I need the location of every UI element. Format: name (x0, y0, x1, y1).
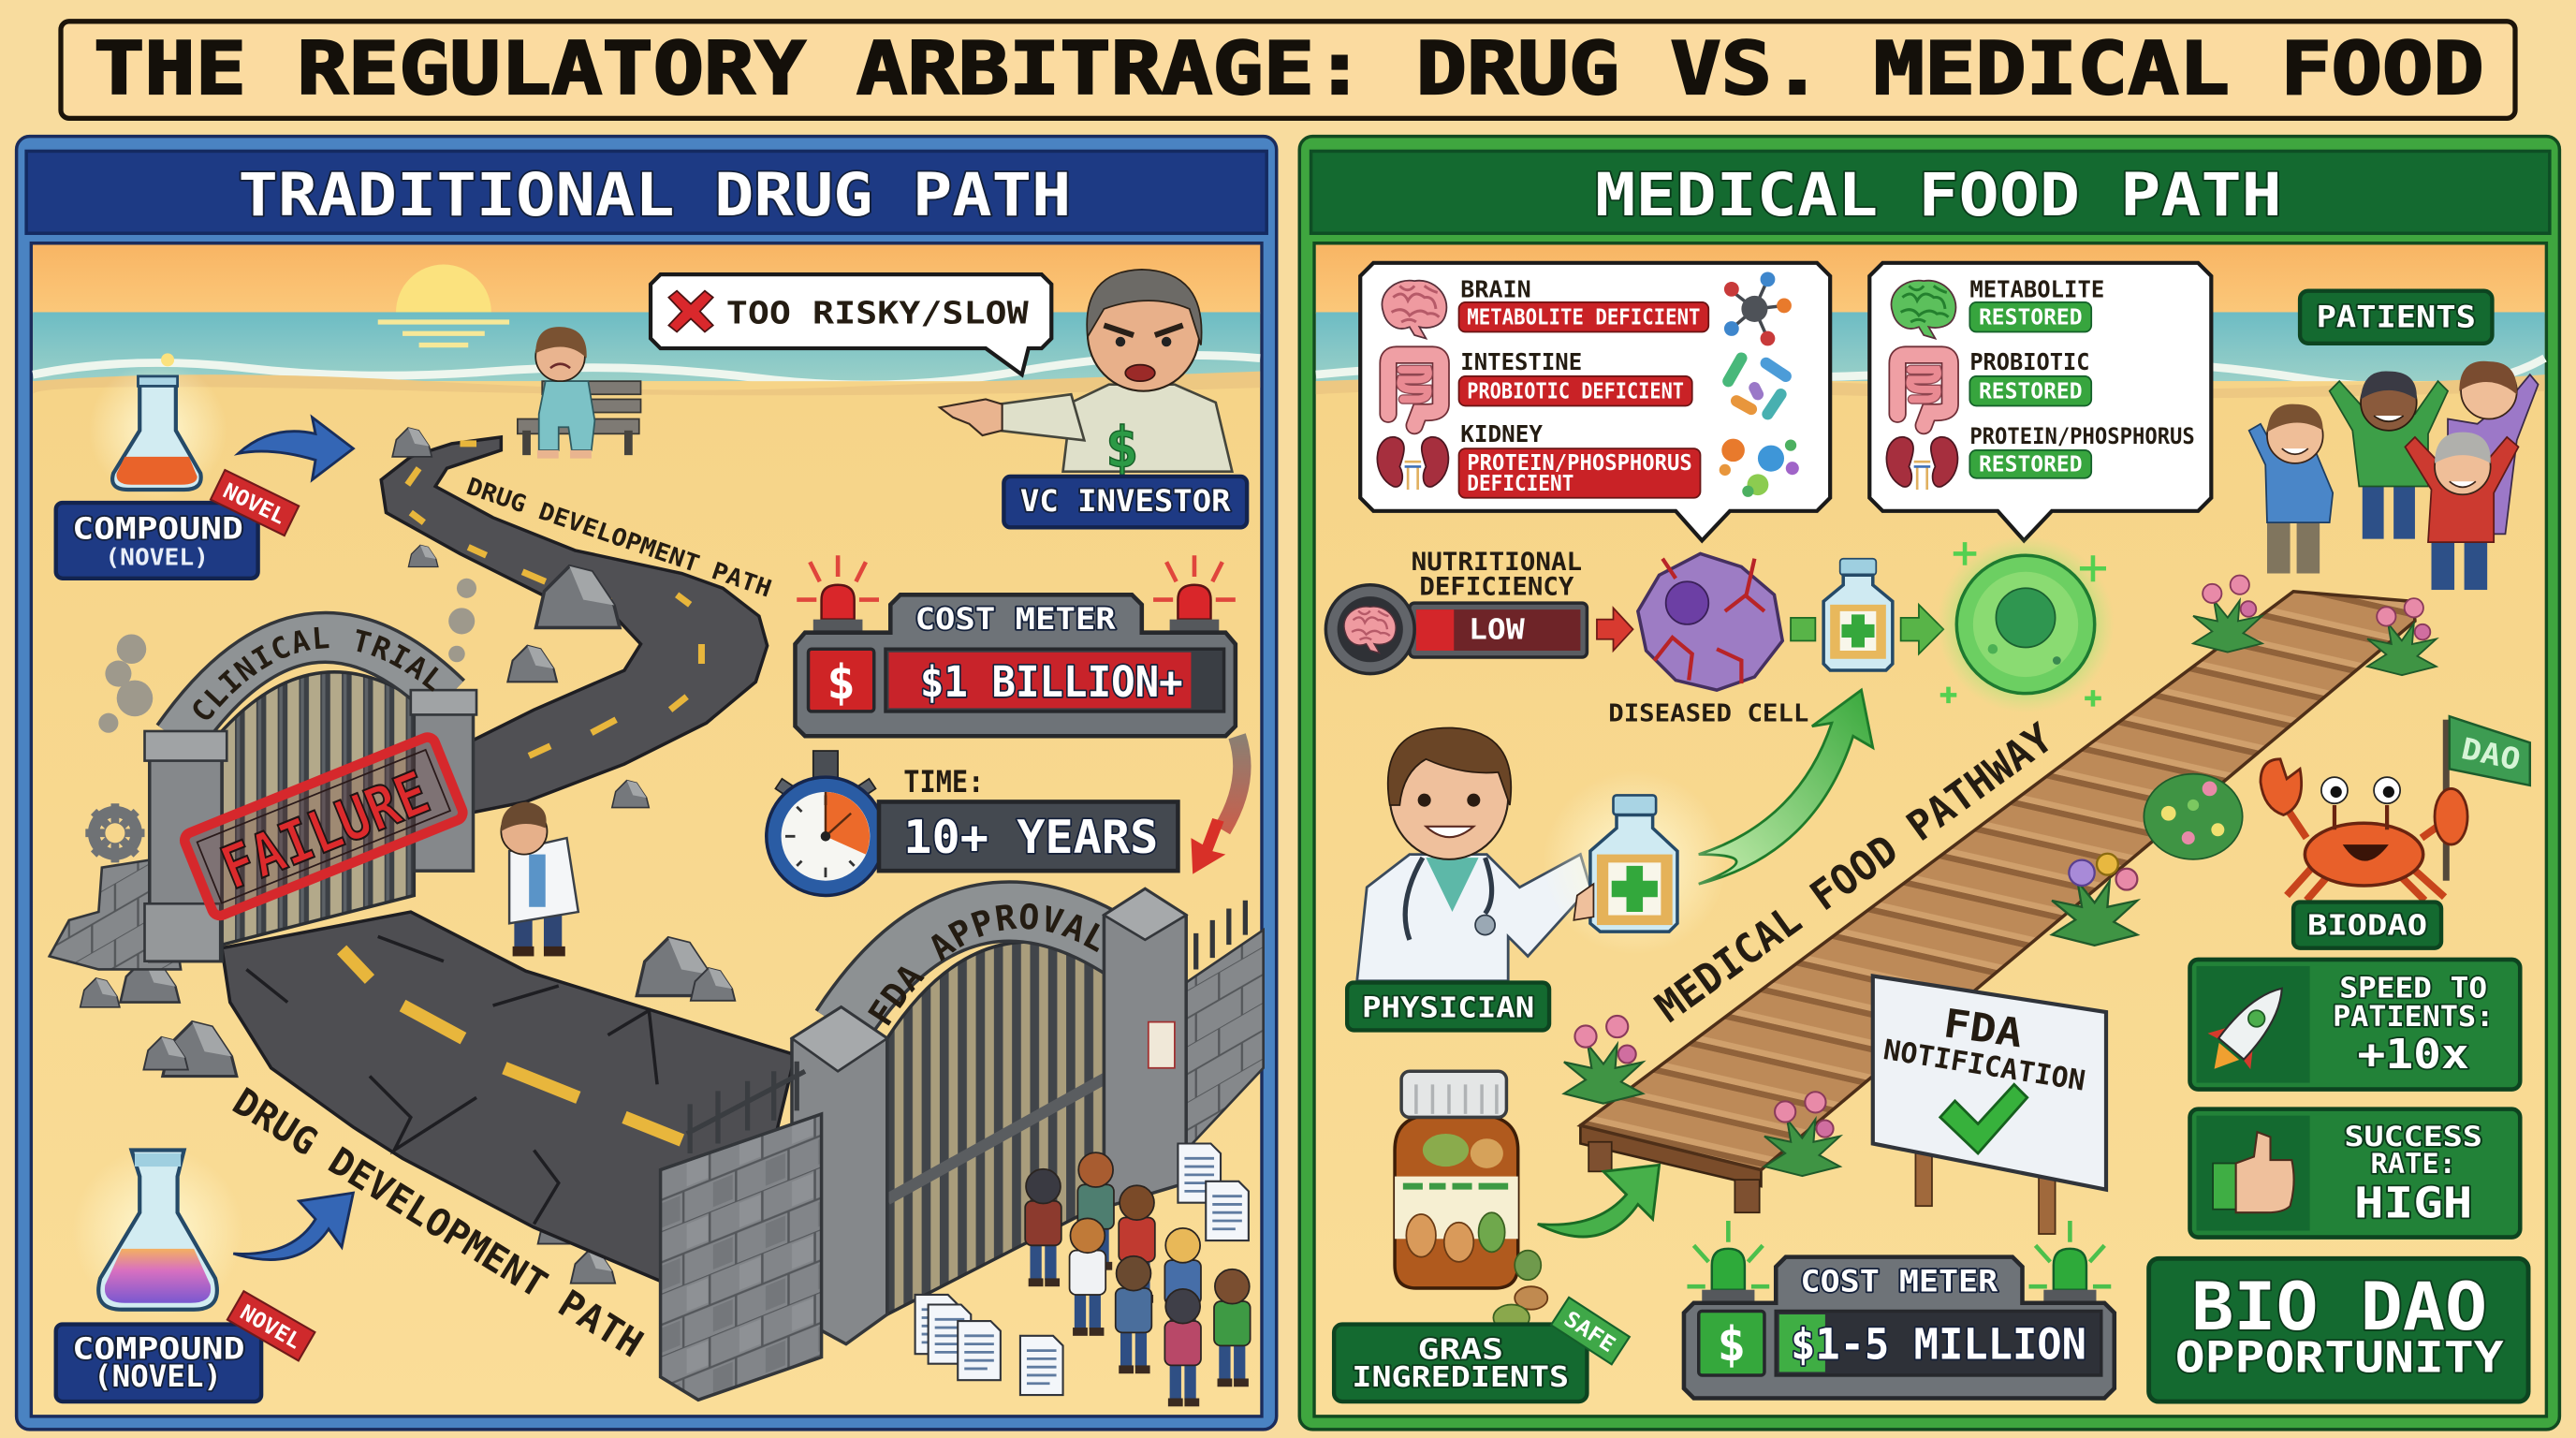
gauge: low brain nutrition (1325, 585, 1587, 674)
stat card: success rate: RATE: (2371, 1148, 2456, 1180)
icon: flask with orange liquid (89, 353, 227, 500)
label: patients (2300, 291, 2492, 344)
icon: brain (1382, 281, 1446, 339)
pill: restored 2 (1969, 376, 2091, 405)
stat card: success rate (2190, 1109, 2520, 1238)
beach scene background (1314, 243, 2546, 1416)
patient: woman in purple (2448, 361, 2539, 534)
label: compound (novel) top: (NOVEL) (105, 544, 209, 571)
heading: traditional drug path: TRADITIONAL DRUG PATH (239, 160, 1071, 229)
readout: 10+ years: 10+ YEARS (903, 810, 1158, 864)
stat card: speed to patients (2190, 960, 2520, 1090)
panel: medical food path (1299, 137, 2559, 1430)
wooden boardwalk (1580, 592, 2415, 1212)
label: time: TIME: (903, 766, 984, 800)
pill: metabolite deficient: METABOLITE DEFICIENT (1467, 306, 1701, 330)
scattered paperwork (915, 1143, 1249, 1395)
pill: protein/phosphorus deficient (1459, 448, 1701, 498)
cost meter: 1 billion (795, 555, 1236, 736)
icon: small medical bottle (1823, 559, 1893, 670)
icon: green sirens (1687, 1221, 2111, 1303)
title banner: THE REGULATORY ARBITRAGE: DRUG VS. MEDICAL FOOD (94, 27, 2484, 111)
smoke trail and red arrow (1191, 736, 1242, 874)
stat card: success rate: HIGH (2354, 1178, 2472, 1227)
arrow: green to healthy cell (1901, 605, 1943, 654)
text: brain: BRAIN (1460, 276, 1531, 303)
label: compound (novel) top (56, 503, 258, 579)
gauge: low brain nutrition: LOW (1469, 614, 1525, 647)
lower cracked road (222, 912, 795, 1284)
icon: green check (1940, 1084, 2027, 1153)
sign: fda notification: NOTIFICATION (1881, 1034, 2087, 1098)
pill: probiotic deficient: PROBIOTIC DEFICIENT (1467, 380, 1684, 404)
figure: crab mascot with DAO flag (2261, 716, 2530, 901)
tag: safe: SAFE (1559, 1307, 1619, 1357)
tag: novel bottom (227, 1291, 315, 1360)
icon: GRAS supplement jar (1395, 1071, 1547, 1331)
speech bubble: restored (1869, 263, 2211, 540)
speech bubble: too risky/slow: TOO RISKY/SLOW (726, 295, 1030, 331)
sign: fda notification (1873, 976, 2106, 1234)
label: patients: PATIENTS (2317, 301, 2476, 334)
panel: traditional drug path (15, 135, 1314, 1431)
stat card: speed to patients: +10x (2358, 1031, 2469, 1078)
label: vc investor (1003, 477, 1247, 527)
flag: dao: DAO (2458, 732, 2524, 777)
label: gras ingredients: GRAS (1418, 1333, 1503, 1366)
icon: molecule (1724, 271, 1792, 345)
patient: man in green (2330, 372, 2448, 539)
icon: diseased cell (1638, 553, 1782, 690)
callout: bio dao opportunity: BIO DAO (2191, 1269, 2487, 1345)
figure: angry VC investor: $ (1105, 416, 1139, 480)
pill: restored 1 (1969, 302, 2091, 332)
cost meter: 1-5 million (1684, 1221, 2115, 1399)
flag: dao (2450, 716, 2530, 785)
icon: kidney (1377, 437, 1448, 490)
pill: protein/phosphorus deficient: DEFICIENT (1467, 472, 1573, 496)
label: compound (novel) bottom (56, 1325, 261, 1401)
stat card: success rate: SUCCESS (2344, 1121, 2482, 1152)
label: physician: PHYSICIAN (1362, 991, 1534, 1024)
text: protein/phosphorus: PROTEIN/PHOSPHORUS (1969, 423, 2195, 449)
flowers along the boardwalk (1564, 576, 2437, 1176)
figure: physician (1357, 727, 1590, 981)
tilted text: drug development path upper: DRUG DEVELOPMENT PATH (463, 472, 775, 603)
icon: intestine restored (1897, 355, 1950, 426)
gate: clinical trial: CLINICAL TRIAL (193, 627, 439, 719)
pill: restored 2: RESTORED (1979, 380, 2083, 404)
icon: stopwatch (767, 751, 885, 895)
icon: gear (85, 803, 145, 862)
patients celebrating (2249, 361, 2539, 590)
speech bubble: too risky/slow (651, 274, 1051, 374)
label: compound (novel) top: COMPOUND (72, 513, 243, 547)
label: gras ingredients (1334, 1325, 1587, 1401)
text: kidney: KIDNEY (1460, 420, 1543, 448)
green dashes to bottle (1791, 618, 1815, 640)
text: metabolite: METABOLITE (1969, 276, 2104, 303)
icon: nutrient blobs (1720, 439, 1799, 497)
purple flower clump (2052, 854, 2137, 946)
callout: bio dao opportunity: OPPORTUNITY (2175, 1332, 2504, 1382)
icon: intestine (1388, 355, 1441, 426)
leafy round bush (2144, 774, 2243, 859)
gate: clinical trial (47, 610, 477, 971)
label: gras ingredients: INGREDIENTS (1352, 1361, 1569, 1394)
arrow: compound to road (239, 418, 353, 479)
label: physician (1347, 983, 1549, 1030)
label: nutritional deficiency: DEFICIENCY (1419, 573, 1574, 601)
stamp: failure: FAILURE (212, 757, 439, 902)
tilted text: medical food pathway: MEDICAL FOOD PATHWAY (1647, 714, 2062, 1032)
label: compound (novel) bottom: (NOVEL) (94, 1360, 222, 1394)
cost meter: 1-5 million: COST METER (1801, 1265, 1998, 1299)
cost meter: 1-5 million: $ (1718, 1317, 1746, 1372)
icon: healthy cell (1937, 536, 2115, 713)
tag: novel top: NOVEL (219, 479, 289, 530)
arrow: curved green from bottle (1699, 690, 1873, 884)
pill: protein/phosphorus deficient: PROTEIN/PHOSPHORUS (1467, 451, 1692, 476)
tag: novel top (211, 470, 299, 536)
heading: medical food path: MEDICAL FOOD PATH (1595, 160, 2282, 229)
figure: sad patient on bench (518, 327, 641, 459)
label: nutritional deficiency (1412, 549, 1582, 601)
stat card: speed to patients: SPEED TO (2339, 972, 2487, 1005)
upper cracked road (381, 437, 768, 814)
arrow: lower compound to road (233, 1193, 353, 1260)
icon: red x (668, 291, 713, 332)
label: nutritional deficiency: NUTRITIONAL (1412, 549, 1582, 577)
label: vc investor: VC INVESTOR (1020, 485, 1232, 519)
figure: angry VC investor (940, 270, 1232, 480)
arrow: red to diseased cell (1597, 608, 1633, 651)
stat card: speed to patients: PATIENTS: (2333, 1001, 2494, 1034)
label: diseased cell: DISEASED CELL (1608, 698, 1808, 726)
text: probiotic: PROBIOTIC (1969, 348, 2089, 375)
beach scene background (31, 243, 1262, 1416)
sign: fda notification: FDA (1941, 1000, 2026, 1056)
figure: dejected scientist (501, 801, 578, 956)
text: intestine: INTESTINE (1460, 348, 1582, 375)
tag: safe (1551, 1298, 1630, 1364)
arrow: ingredients to boardwalk (1538, 1165, 1660, 1237)
icon: red alarm sirens (797, 555, 1236, 633)
icon: bacteria (1728, 359, 1786, 414)
tag: novel bottom: NOVEL (236, 1300, 305, 1355)
pill: restored 1: RESTORED (1979, 306, 2083, 330)
icon: flask with purple liquid (72, 1147, 243, 1318)
smoke puffs (98, 579, 476, 733)
pill: restored 3: RESTORED (1979, 453, 2083, 477)
cost meter: 1 billion: $ (827, 655, 856, 711)
readout: 10+ years (879, 801, 1178, 871)
label: biodao: BIODAO (2307, 910, 2427, 943)
crowd waiting at FDA gate (1025, 1152, 1251, 1406)
patient: older man in red (2405, 433, 2519, 590)
icon: rocket (2193, 971, 2304, 1087)
icon: kidney restored (1886, 437, 1957, 490)
icon: glowing medical food bottle (1543, 770, 1727, 955)
cost meter: 1 billion: $1 BILLION+ (920, 657, 1183, 707)
cost meter: 1-5 million: $1-5 MILLION (1791, 1319, 2086, 1369)
FDA gate and fortified wall: FDA APPROVAL (868, 902, 1100, 1026)
rocks along the road (80, 428, 735, 1284)
FDA gate and fortified wall (659, 880, 1265, 1402)
label: biodao (2293, 902, 2441, 948)
icon: thumbs up (2213, 1132, 2294, 1212)
callout: bio dao opportunity (2149, 1258, 2528, 1401)
cost meter: 1 billion: COST METER (915, 603, 1117, 637)
patient: man in blue (2249, 404, 2333, 574)
tilted text: drug development path lower: DRUG DEVELOPMENT PATH (225, 1079, 651, 1366)
label: compound (novel) bottom: COMPOUND (72, 1332, 245, 1366)
speech bubble: deficiencies (1360, 263, 1830, 540)
icon: green brain (1891, 281, 1955, 339)
